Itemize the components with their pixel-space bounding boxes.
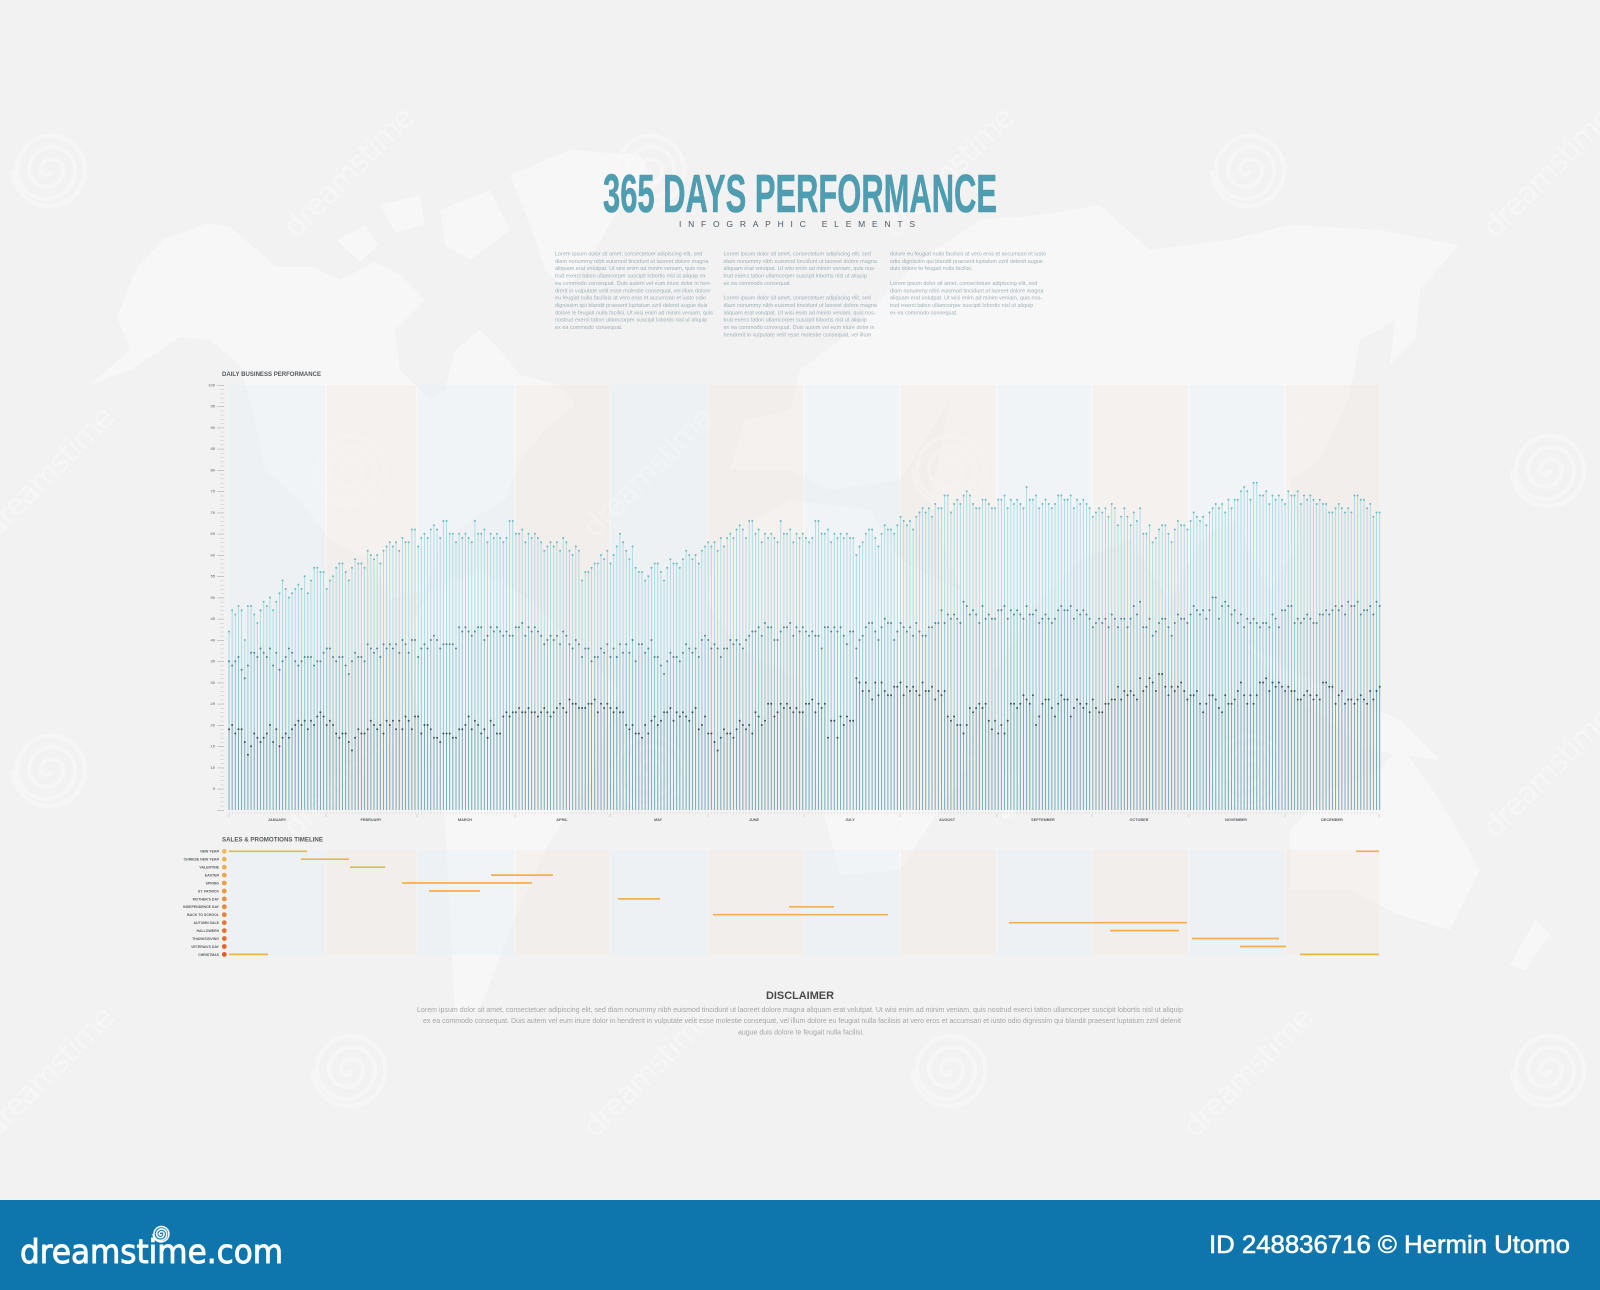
watermark diagonal text: dreamstime (277, 700, 422, 845)
x axis with month labels: NOVEMBER (1225, 818, 1247, 822)
y axis: 10 (211, 765, 216, 770)
world map background (90, 150, 1550, 1015)
timeline row labels (183, 850, 220, 957)
x axis with month labels: JULY (845, 818, 855, 822)
lollipop chart: 365 days, three series (229, 483, 1380, 810)
timeline row markers (222, 849, 227, 957)
x axis with month labels: MARCH (458, 818, 472, 822)
y axis: 55 (211, 574, 216, 579)
intro text column 1: ea commodo consequat. Duis autem vel eum iriure dolor in hen- (555, 281, 711, 287)
intro text column 1: nostrud exerci tation ullamcorper suscipit lobortis nisl ut aliquip (555, 318, 707, 324)
series 2 dots (229, 598, 1380, 810)
series 3 dots (229, 674, 1380, 810)
intro text column 2: trud exerci tation ullamcorper suscipit lobortis nisl ut aliquip (724, 274, 867, 280)
timeline row labels: VETERAN'S DAY (191, 945, 220, 949)
timeline row labels: MOTHER'S DAY (193, 897, 220, 901)
heading: daily business performance: DAILY BUSINESS PERFORMANCE (222, 371, 322, 378)
intro text column 1: ex ea commodo consequat. (555, 325, 623, 331)
timeline row labels: VALENTINE (199, 866, 220, 870)
y axis: 75 (211, 489, 216, 494)
intro text column 1: Lorem ipsum dolor sit amet, consectetuer adipiscing elit, sed (555, 252, 702, 258)
watermark diagonal text: dreamstime (877, 700, 1022, 845)
timeline row labels: NEW YEAR (200, 850, 219, 854)
y axis: 25 (211, 701, 216, 706)
y axis: 30 (211, 680, 216, 685)
y axis: 20 (211, 722, 216, 728)
intro text column 1 (555, 252, 713, 331)
footer logo spiral (153, 1227, 169, 1242)
footer logo text: dreamstime.com (20, 1232, 283, 1271)
disclaimer text (417, 1005, 1183, 1036)
intro text column 2 (724, 252, 878, 338)
disclaimer text: augue duis dolore te feugait nulla facilisi. (738, 1028, 864, 1036)
watermark diagonal text: dreamstime (576, 400, 721, 545)
timeline row labels: INDEPENDENCE DAY (183, 905, 220, 909)
intro text column 3: dolore eu feugiat nulla facilisis at vero eros et accumsan et iusto (890, 252, 1046, 258)
x axis with month labels: OCTOBER (1130, 818, 1149, 822)
intro text column 1: diam nonummy nibh euismod tincidunt ut laoreet dolore magna (555, 259, 709, 265)
x axis with month labels: AUGUST (939, 818, 956, 822)
watermark diagonal text: dreamstime (1176, 1000, 1321, 1145)
x axis with month labels: DECEMBER (1321, 818, 1343, 822)
intro text column 2: trud exerci tation ullamcorper suscipit lobortis nisl ut aliquip (724, 318, 867, 324)
intro text column 1: aliquam erat volutpat. Ut wisi enim ad minim veniam, quis nos- (555, 266, 707, 272)
y axis: 80 (211, 468, 216, 472)
y axis: 35 (211, 659, 216, 664)
watermark diagonal text: dreamstime (877, 100, 1022, 245)
intro text column 1: dolore te feugait nulla facilisi. Ut wisi enim ad minim veniam, quis (555, 310, 713, 316)
x axis with month labels: FEBRUARY (361, 818, 382, 822)
intro text column 1: trud exerci tation ullamcorper suscipit lobortis nisl ut aliquip ex (555, 274, 706, 280)
intro text column 2: diam nonummy nibh euismod tincidunt ut laoreet dolore magna (724, 303, 878, 309)
intro text column 2: diam nonummy nibh euismod tincidunt ut laoreet dolore magna (724, 259, 878, 265)
x axis with month labels: SEPTEMBER (1031, 818, 1055, 822)
intro text column 3: duis dolore te feugait nulla facilisi. (890, 266, 973, 272)
timeline row labels: ST. PATRICK (198, 889, 219, 893)
timeline row labels: BACK TO SCHOOL (187, 913, 220, 917)
watermark diagonal text: dreamstime (1176, 400, 1321, 545)
y axis: 65 (211, 531, 216, 536)
y axis (208, 382, 222, 811)
timeline row labels: AUTUMN SALE (194, 921, 220, 925)
intro text column 3: aliquam erat volutpat. Ut wisi enim ad minim veniam, quis nos- (890, 296, 1042, 302)
watermark diagonal text: dreamstime (576, 1000, 721, 1145)
series 2 stems (229, 598, 1380, 810)
intro text column 3 (890, 252, 1046, 316)
intro text column 3: odio dignissim qui blandit praesent luptatum zzril delenit augue (890, 259, 1043, 265)
heading: sales and promotions timeline: SALES & PROMOTIONS TIMELINE (222, 836, 324, 844)
intro text column 1: dignissim qui blandit praesent luptatum zzril delenit augue duis (555, 303, 708, 309)
timeline row labels: THANKSGIVING (192, 937, 219, 941)
disclaimer heading: DISCLAIMER (766, 990, 834, 1002)
month bands: timeline (229, 850, 1379, 955)
intro text column 2: hendrerit in vulputate velit esse molestie consequat, vel illum (724, 332, 872, 338)
disclaimer text: ex ea commodo consequat. Duis autem vel eum iriure dolor in hendrerit in vulputate velit esse molestie consequat, vel illum dolore eu feugiat nulla facilisis at vero eros et accumsan et iusto odio dignissim qui blandit praesent luptatum zzril delenit (423, 1016, 1181, 1025)
month bands: daily chart (229, 385, 1379, 810)
intro text column 1: eu feugiat nulla facilisis at vero eros et accumsan et iusto odio (555, 296, 706, 302)
x axis with month labels: APRIL (556, 818, 568, 822)
x axis with month labels: JUNE (749, 818, 760, 822)
series 1 stems (229, 483, 1380, 810)
series 3 stems (229, 674, 1380, 810)
intro text column 2: aliquam erat volutpat. Ut wisi enim ad minim veniam, quis nos- (724, 310, 876, 316)
timeline row labels: SPRING (206, 881, 219, 885)
x axis with month labels: MAY (654, 818, 663, 822)
title: 365 DAYS PERFORMANCE (603, 164, 997, 224)
y axis: 5 (213, 786, 216, 791)
watermark diagonal text: dreamstime (277, 100, 422, 245)
y axis: 70 (211, 510, 216, 515)
x axis with month labels: JANUARY (268, 818, 287, 822)
intro text column 3: diam nonummy nibh euismod tincidunt ut laoreet dolore magna (890, 288, 1044, 294)
disclaimer text: Lorem ipsum dolor sit amet, consectetuer adipiscing elit, sed diam nonummy nibh euismod tincidunt ut laoreet dolore magna aliquam erat volutpat. Ut wisi enim ad minim veniam, quis nostrud exerci tation ullamcorper suscipit lobortis nisl ut aliquip (417, 1005, 1183, 1014)
y axis: 95 (211, 404, 216, 409)
watermark spirals (13, 136, 1584, 1106)
y axis: 15 (211, 744, 216, 749)
y axis: 100 (208, 382, 216, 388)
intro text column 2: aliquam erat volutpat. Ut wisi enim ad minim veniam, quis nos- (724, 266, 876, 272)
footer image id and author: ID 248836716 © Hermin Utomo (1209, 1231, 1570, 1259)
timeline bars (229, 851, 1379, 954)
intro text column 2: Lorem ipsum dolor sit amet, consectetuer adipiscing elit, sed (724, 252, 871, 258)
series 1 dots (229, 483, 1380, 810)
intro text column 2: ex ea commodo consequat. (724, 281, 792, 287)
y axis: 90 (211, 425, 216, 430)
y axis: 45 (211, 616, 216, 621)
y axis: 85 (211, 446, 216, 451)
subtitle: INFOGRAPHIC ELEMENTS (679, 219, 915, 229)
intro text column 2: ex ea commodo consequat. Duis autem vel eum iriure dolor in (724, 325, 875, 331)
y axis: 60 (211, 552, 216, 558)
timeline row labels: EASTER (205, 874, 219, 878)
timeline row labels: HALLOWEEN (196, 929, 219, 933)
x axis with month labels (229, 813, 1379, 822)
timeline row labels: CHRISTMAS (198, 953, 220, 957)
intro text column 3: ex ea commodo consequat. (890, 310, 958, 316)
y axis: 50 (211, 595, 216, 600)
intro text column 3: trud exerci tation ullamcorper suscipit lobortis nisl ut aliquip (890, 303, 1033, 309)
timeline row labels: CHINESE NEW YEAR (184, 858, 219, 862)
footer bar (0, 1200, 1600, 1290)
intro text column 1: drerit in vulputate velit esse molestie consequat, vel illum dolore (555, 288, 710, 294)
intro text column 3: Lorem ipsum dolor sit amet, consectetuer adipiscing elit, sed (890, 281, 1037, 287)
y axis: 40 (211, 638, 216, 642)
intro text column 2: Lorem ipsum dolor sit amet, consectetuer adipiscing elit, sed (724, 296, 871, 302)
